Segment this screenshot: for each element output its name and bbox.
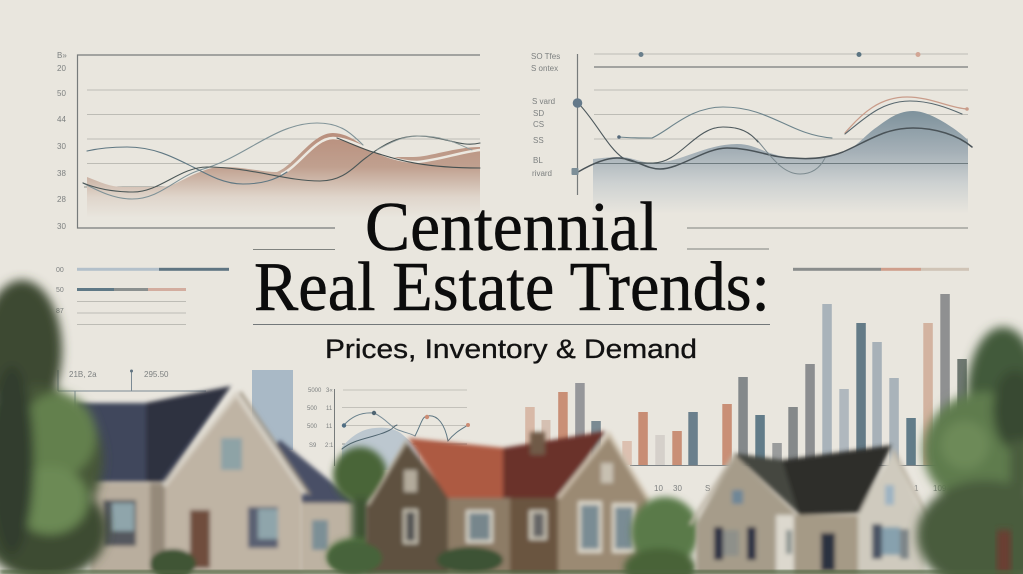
house two middle wall xyxy=(448,497,512,574)
bar chart bars xyxy=(525,294,967,465)
house three dark roof left xyxy=(733,453,800,515)
bar chart axis labels xyxy=(654,484,947,493)
house one wing shadow xyxy=(150,483,166,573)
house two bushes xyxy=(328,542,503,574)
house one gable trim xyxy=(164,394,305,494)
house two right wall xyxy=(558,436,648,574)
house one right window xyxy=(248,507,278,548)
house two chimney xyxy=(530,432,545,455)
house two orange roof xyxy=(408,438,505,498)
house one door xyxy=(190,510,210,568)
progress bar labels: 50 xyxy=(56,287,64,294)
house one left wing xyxy=(90,483,166,573)
house three white strip xyxy=(776,515,794,574)
center small tree xyxy=(327,447,387,574)
inventory chart labels: CS xyxy=(533,120,544,129)
inventory chart labels: SS xyxy=(533,136,544,145)
bar chart baseline xyxy=(630,464,950,466)
bar chart axis labels: 109 xyxy=(933,484,947,493)
price chart y axis labels: 38 xyxy=(57,169,66,178)
inventory chart labels: rivard xyxy=(532,169,552,178)
inventory chart dark upper curve xyxy=(845,101,962,134)
mini chart dots xyxy=(342,411,470,428)
panel: bar chart xyxy=(525,294,967,493)
progress bar rules xyxy=(77,302,186,324)
scene: houses and trees xyxy=(0,280,1023,574)
timeline axis xyxy=(58,370,206,410)
mini chart labels: 2:1 xyxy=(325,443,334,449)
main title line two: Real Estate Trends: xyxy=(254,249,770,326)
mini chart labels: 500 xyxy=(307,406,318,412)
house two gable trim xyxy=(558,434,650,502)
house one upper window xyxy=(221,438,242,470)
mini chart labels: 11 xyxy=(326,406,333,412)
house one: main house xyxy=(75,386,310,574)
center bush xyxy=(624,497,699,574)
bar chart axis labels: S xyxy=(705,484,710,493)
inventory chart grid lines xyxy=(594,54,968,249)
house three dark roof right xyxy=(782,445,892,515)
right progress bar xyxy=(793,268,969,271)
price chart y axis labels: 28 xyxy=(57,195,66,204)
inventory chart midline xyxy=(594,162,968,164)
inventory chart dark curve xyxy=(578,103,758,163)
inventory chart labels xyxy=(531,52,560,178)
inventory chart labels: SO Tfes xyxy=(531,52,560,61)
inventory chart grey dip curve xyxy=(757,140,825,174)
right tree trunk xyxy=(997,530,1011,574)
mini chart labels: 3« xyxy=(326,388,333,394)
price chart grid lines xyxy=(84,90,480,187)
inventory chart pink curve xyxy=(845,97,967,133)
price chart trend curve xyxy=(83,123,363,199)
inventory chart labels: S ontex xyxy=(531,64,558,73)
inventory chart timeline markers xyxy=(638,52,920,57)
inventory chart shaded area xyxy=(593,111,968,214)
house one: side small house xyxy=(275,440,357,573)
progress bar labels xyxy=(56,267,64,315)
house three right wall xyxy=(858,452,925,574)
price chart trend curve xyxy=(337,138,480,168)
mini chart labels: 5000 xyxy=(308,388,322,394)
panel: small timeline chart xyxy=(58,370,293,450)
house two windows xyxy=(403,463,636,553)
timeline labels xyxy=(69,370,169,379)
inventory chart blue curve xyxy=(619,107,832,138)
mini chart labels: 11 xyxy=(326,424,333,430)
house two dark red roof xyxy=(503,431,606,498)
house three gable trim xyxy=(690,450,932,525)
mini chart labels: S9 xyxy=(309,443,317,449)
subtitle: Prices, Inventory & Demand xyxy=(325,334,697,364)
price chart y axis labels: 30 xyxy=(57,142,66,151)
price chart highlight line xyxy=(282,138,480,174)
bar chart axis labels: 30 xyxy=(673,484,682,493)
inventory chart labels: SD xyxy=(533,109,544,118)
main title line one: Centennial xyxy=(365,189,658,266)
bar chart axis labels: 10 xyxy=(654,484,663,493)
inventory chart labels: BL xyxy=(533,156,543,165)
left large tree xyxy=(0,280,107,574)
mini chart labels: 500 xyxy=(307,424,318,430)
timeline labels: 21B, 2a xyxy=(69,370,97,379)
house three xyxy=(690,445,932,574)
ground strip xyxy=(0,570,1023,574)
mini chart labels xyxy=(307,388,334,449)
house three windows xyxy=(714,485,909,560)
house one roof xyxy=(75,386,231,482)
inventory chart labels: S vard xyxy=(532,97,555,106)
price chart trend curve xyxy=(377,136,472,150)
house three center wing xyxy=(775,515,865,574)
timeline labels: 295.50 xyxy=(144,370,169,379)
house two brown wall xyxy=(366,442,450,574)
house two xyxy=(328,431,650,574)
house three left wall xyxy=(696,455,797,574)
panel: price line chart xyxy=(57,51,480,231)
price chart y axis labels xyxy=(57,51,67,231)
mini chart axis and grid xyxy=(334,389,467,466)
house three door xyxy=(821,533,835,571)
house one gable wall xyxy=(165,396,302,574)
progress bar labels: 00 xyxy=(56,267,64,274)
mini chart area xyxy=(342,428,420,470)
title block xyxy=(253,189,770,364)
panel: progress bars xyxy=(56,267,969,324)
price chart shaded area xyxy=(87,133,480,218)
price chart trend curve xyxy=(87,147,287,184)
house one bush xyxy=(150,549,196,574)
house one dark roof face xyxy=(146,386,231,482)
progress bar one xyxy=(77,268,229,271)
inventory chart end markers xyxy=(572,98,969,175)
inventory chart axis xyxy=(576,54,578,195)
bar chart axis labels: 1 xyxy=(914,484,919,493)
panel: inventory line chart xyxy=(531,52,972,249)
blue rectangle bar xyxy=(252,370,293,450)
price chart y axis labels: 50 xyxy=(57,89,66,98)
price chart y axis labels: 20 xyxy=(57,64,66,73)
price chart axis frame xyxy=(78,55,480,228)
panel: mini line chart xyxy=(307,388,470,470)
timeline marker xyxy=(130,370,133,372)
house one trim right xyxy=(240,392,310,495)
right tree xyxy=(917,327,1023,574)
mini chart lines xyxy=(342,413,468,449)
inventory chart thick curve xyxy=(578,128,972,172)
title underline xyxy=(253,324,770,326)
price chart y axis labels: 30 xyxy=(57,222,66,231)
house two left trim xyxy=(368,440,407,505)
price chart y axis labels: 44 xyxy=(57,115,66,124)
title rule top left xyxy=(253,248,335,250)
house one left window xyxy=(103,500,136,546)
progress bar two xyxy=(77,288,186,291)
house two brown right wall xyxy=(510,497,560,574)
progress bar labels: 87 xyxy=(56,308,64,315)
price chart trend curve xyxy=(83,136,480,192)
price chart y axis labels: B» xyxy=(57,51,67,60)
